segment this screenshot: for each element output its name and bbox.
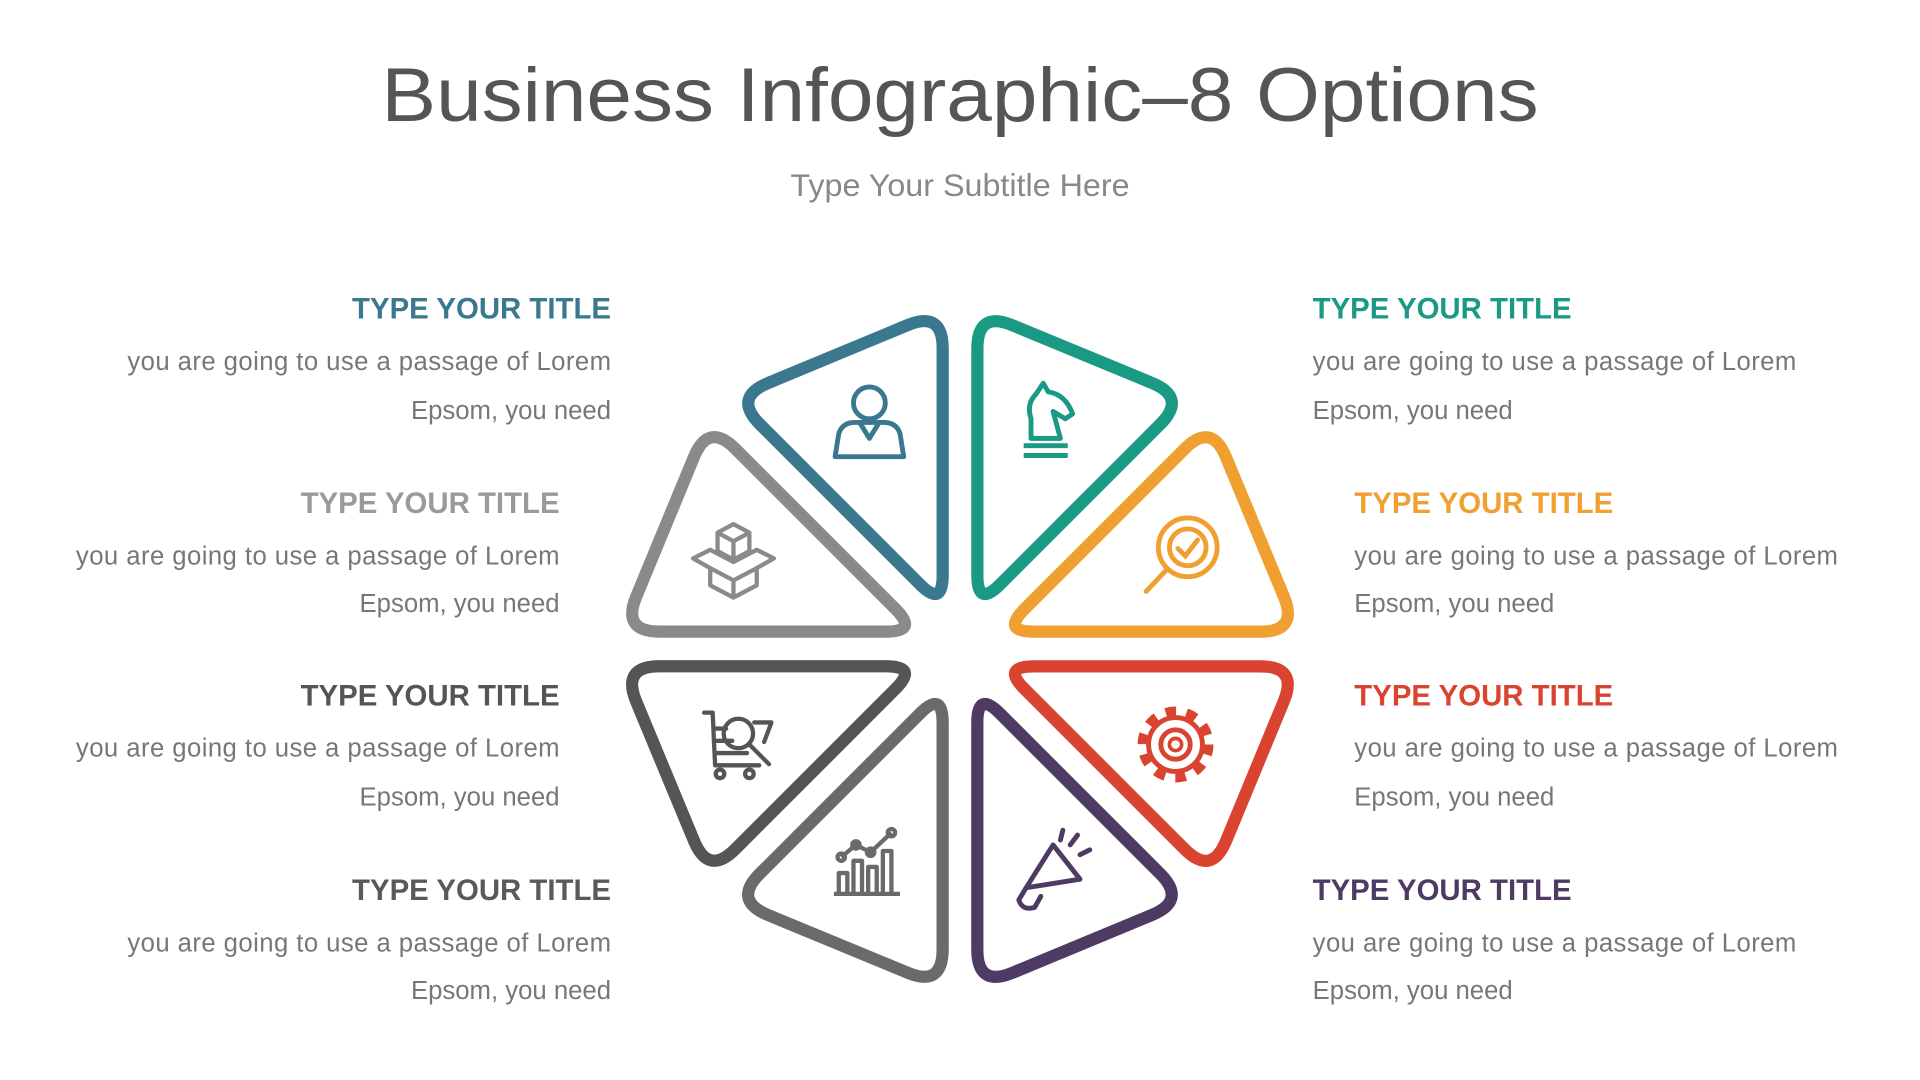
text block: right 1: you are going to use a passage of Lorem	[1313, 348, 1796, 376]
text block: right 4: TYPE YOUR TITLE	[1313, 874, 1572, 907]
text block: right 4: you are going to use a passage of Lorem	[1313, 929, 1796, 957]
icon: person	[835, 387, 904, 457]
text block: left 4: you are going to use a passage of Lorem	[127, 929, 611, 957]
text block: right 3	[1354, 679, 1838, 812]
text block: right 3: you are going to use a passage of Lorem	[1354, 735, 1838, 763]
text block: right 4: Epsom, you need	[1313, 977, 1513, 1005]
petal: dark gray cart	[578, 538, 909, 868]
icon: gear	[1142, 711, 1209, 778]
text block: right 1: Epsom, you need	[1313, 397, 1513, 425]
text block: left 2	[76, 487, 560, 618]
text block: left 1: TYPE YOUR TITLE	[352, 292, 611, 325]
petal: light gray boxes	[632, 437, 905, 632]
text block: left 3: Epsom, you need	[360, 784, 560, 812]
subtitle: Type Your Subtitle Here	[790, 167, 1130, 203]
petal: orange	[1011, 429, 1342, 760]
icon: bar chart	[834, 829, 900, 894]
text block: left 4: Epsom, you need	[411, 977, 611, 1005]
petal: red	[1015, 666, 1288, 861]
icon: megaphone	[1019, 830, 1090, 908]
icon: boxes	[693, 524, 774, 598]
text block: right 3: TYPE YOUR TITLE	[1354, 679, 1613, 712]
icon: magnifier check	[1146, 518, 1217, 591]
text block: left 4	[127, 874, 611, 1005]
text block: left 2: Epsom, you need	[360, 590, 560, 618]
text block: right 4	[1313, 874, 1796, 1005]
text block: right 1: TYPE YOUR TITLE	[1313, 292, 1572, 325]
flower diagram	[578, 267, 1342, 1031]
text block: left 1	[127, 292, 611, 425]
text block: left 1: Epsom, you need	[411, 397, 611, 425]
title: Business Infographic–8 Options	[381, 53, 1539, 138]
icon: chess knight	[1024, 383, 1073, 456]
text block: left 1: you are going to use a passage of Lorem	[127, 348, 611, 376]
petal: blue	[741, 267, 1071, 598]
text block: right 2: TYPE YOUR TITLE	[1354, 487, 1613, 520]
text block: left 3	[76, 679, 560, 812]
petal: purple	[849, 700, 1179, 1031]
text block: right 2	[1354, 487, 1838, 618]
text block: left 3: you are going to use a passage of Lorem	[76, 735, 560, 763]
petal: teal	[977, 321, 1172, 594]
icon: cart	[704, 713, 771, 778]
text block: right 1	[1313, 292, 1796, 425]
text block: left 2: TYPE YOUR TITLE	[301, 487, 560, 520]
text block: right 3: Epsom, you need	[1354, 784, 1554, 812]
petal: gray chart	[748, 704, 943, 977]
text block: right 2: Epsom, you need	[1354, 590, 1554, 618]
text block: left 2: you are going to use a passage of Lorem	[76, 542, 560, 570]
text block: right 2: you are going to use a passage of Lorem	[1354, 542, 1838, 570]
text block: left 4: TYPE YOUR TITLE	[352, 874, 611, 907]
text block: left 3: TYPE YOUR TITLE	[301, 679, 560, 712]
